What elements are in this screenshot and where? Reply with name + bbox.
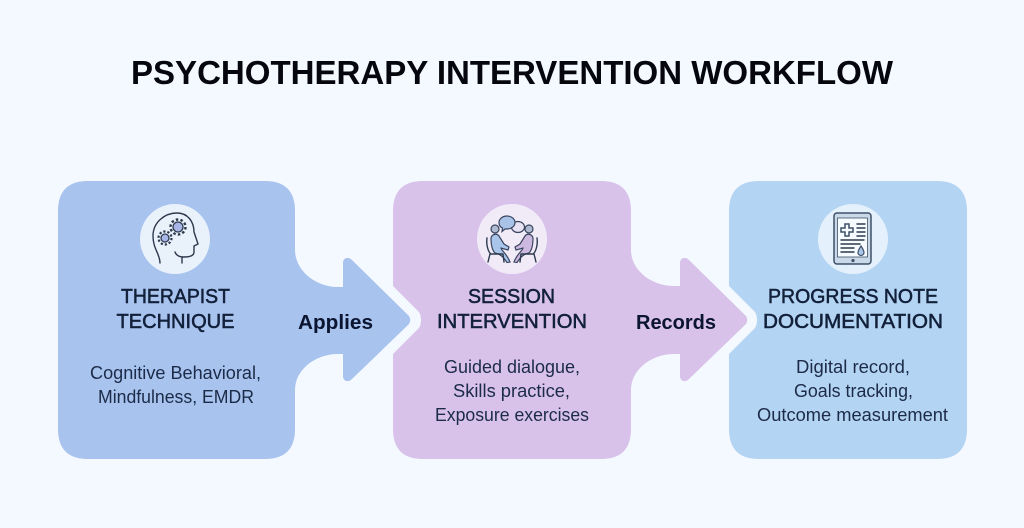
text: session intervention details: Skills practice, bbox=[453, 381, 570, 401]
text: documentation details: Digital record, bbox=[796, 357, 910, 377]
heading: progress note documentation: PROGRESS NOTE bbox=[768, 286, 938, 308]
text: documentation details bbox=[757, 357, 948, 425]
panel: therapist technique bbox=[58, 181, 410, 459]
heading: session intervention: INTERVENTION bbox=[437, 311, 587, 333]
icon: two people talking bbox=[477, 204, 547, 274]
panel shape: blue bbox=[729, 181, 967, 459]
heading: session intervention bbox=[437, 286, 587, 333]
title: PSYCHOTHERAPY INTERVENTION WORKFLOW bbox=[131, 54, 894, 91]
panel: session intervention bbox=[393, 181, 747, 459]
panel: progress note documentation bbox=[729, 181, 967, 459]
heading: session intervention: SESSION bbox=[468, 286, 555, 308]
text: session intervention details: Exposure exercises bbox=[435, 405, 589, 425]
text: session intervention details: Guided dialogue, bbox=[444, 357, 580, 377]
heading: therapist technique: THERAPIST bbox=[121, 286, 230, 308]
heading: progress note documentation: DOCUMENTATION bbox=[763, 311, 943, 333]
text: documentation details: Goals tracking, bbox=[794, 381, 913, 401]
arrow label: records: Records bbox=[636, 312, 716, 334]
text: documentation details: Outcome measurement bbox=[757, 405, 948, 425]
text: therapist technique details: Cognitive Behavioral, bbox=[90, 363, 261, 383]
heading: therapist technique: TECHNIQUE bbox=[116, 311, 234, 333]
text: therapist technique details bbox=[90, 363, 261, 407]
text: therapist technique details: Mindfulness, EMDR bbox=[98, 387, 254, 407]
panel shape with arrow: purple bbox=[393, 181, 747, 459]
heading: progress note documentation bbox=[763, 286, 943, 333]
text: session intervention details bbox=[435, 357, 589, 425]
panel shape with arrow: blue bbox=[58, 181, 410, 459]
heading: therapist technique bbox=[116, 286, 234, 333]
icon: tablet with medical record bbox=[818, 204, 888, 274]
icon: head with gears bbox=[140, 204, 210, 274]
arrow label: applies: Applies bbox=[298, 312, 373, 334]
